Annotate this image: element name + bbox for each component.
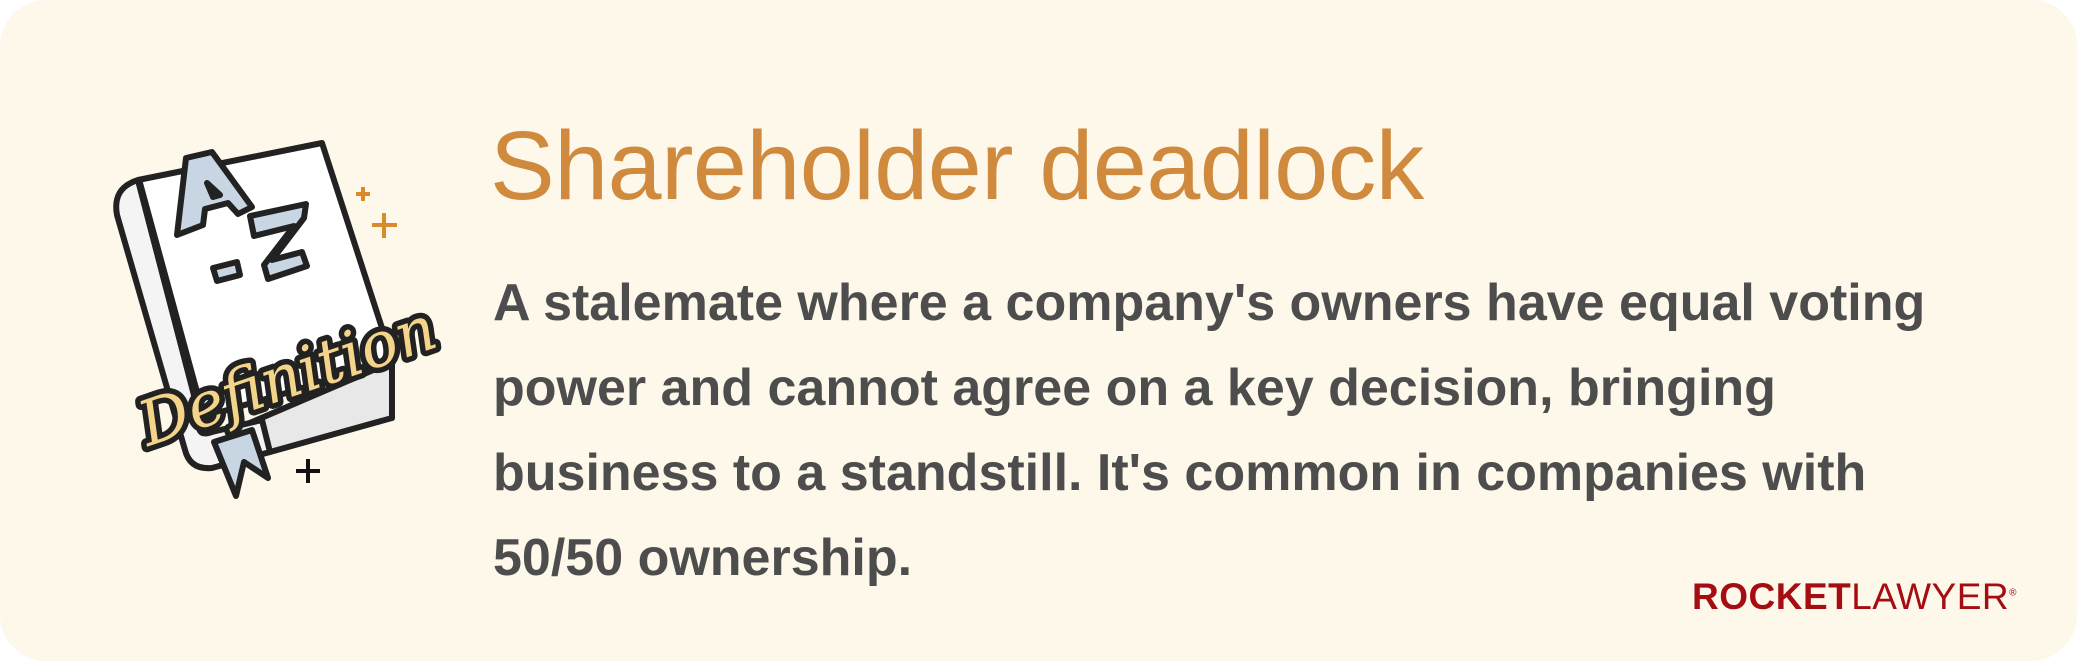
Z: [250, 204, 307, 279]
bookmark: [214, 430, 268, 496]
cover: [138, 143, 393, 418]
text block: definition: power and cannot agree on a key decision, bringing: [493, 359, 1776, 417]
spine and bottom curl: [116, 180, 270, 468]
title: Shareholder deadlock: [490, 111, 1424, 220]
dash: [213, 262, 240, 281]
Definition script: Definition: [128, 291, 445, 461]
sparkles: [356, 187, 397, 238]
pages: [210, 362, 392, 452]
text block: definition: business to a standstill. It's common in companies with: [493, 444, 1866, 502]
icon: definition book: [113, 140, 445, 499]
text block: definition: 50/50 ownership.: [493, 529, 912, 587]
text block: definition: [493, 274, 1925, 587]
logo: ROCKETLAWYER®: [1692, 576, 2017, 617]
A: [177, 152, 252, 235]
text block: definition: A stalemate where a company's owners have equal voting: [493, 274, 1925, 332]
